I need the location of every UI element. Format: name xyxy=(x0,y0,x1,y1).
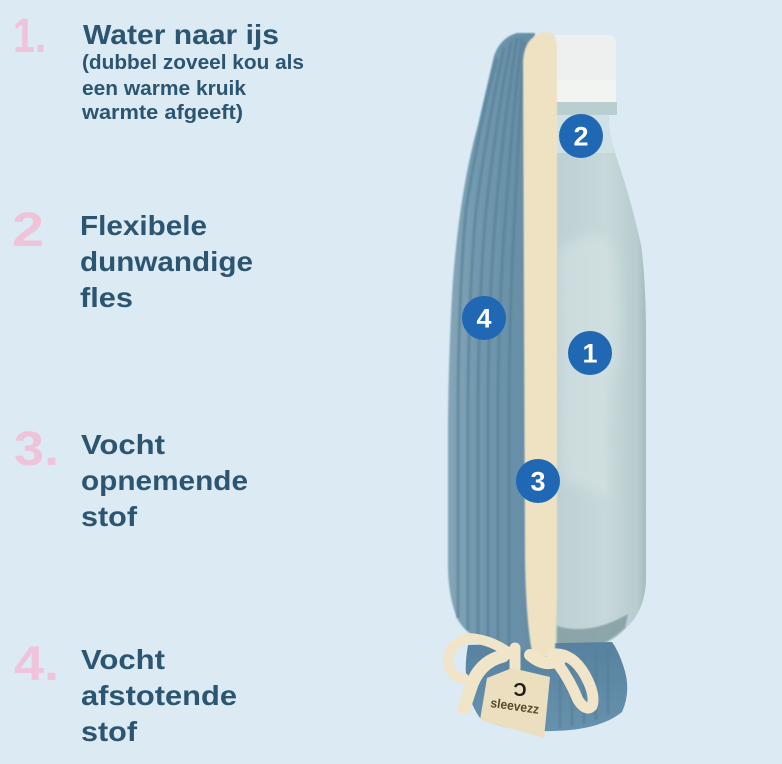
heading: vocht opnemende stof: Vocht xyxy=(81,429,165,460)
explanation text: een warme kruik xyxy=(82,78,247,100)
bottle cap xyxy=(555,35,616,102)
illustration: bottle with sleeve xyxy=(448,32,646,738)
heading: water naar ijs: Water naar ijs xyxy=(83,19,279,50)
heading: vocht afstotende stof: afstotende xyxy=(81,680,237,711)
sleeve ribs xyxy=(458,38,608,728)
heading: flexibele dunwandige fles xyxy=(80,210,253,313)
heading: flexibele dunwandige fles: dunwandige xyxy=(80,246,253,277)
number 2: 2 xyxy=(12,204,44,257)
heading: vocht afstotende stof: stof xyxy=(81,716,138,747)
cord with bow xyxy=(448,638,593,708)
explanation text: warmte afgeeft) xyxy=(81,102,243,124)
marker 3 xyxy=(516,459,560,503)
item 2: flexibele dunwandige fles xyxy=(12,204,253,313)
heading: vocht opnemende stof: stof xyxy=(81,501,138,532)
marker 2: 2 xyxy=(573,122,589,152)
marker 2 xyxy=(559,114,603,158)
heading: vocht afstotende stof xyxy=(81,644,237,747)
heading: flexibele dunwandige fles: fles xyxy=(80,282,133,313)
knit sleeve xyxy=(448,33,535,652)
marker 1: 1 xyxy=(582,338,598,368)
heading: flexibele dunwandige fles: Flexibele xyxy=(80,210,207,241)
bottle neck xyxy=(555,102,617,153)
glass bottle body xyxy=(555,153,646,647)
explanation text xyxy=(81,52,304,124)
number 4: 4. xyxy=(14,638,59,691)
number 3: 3. xyxy=(14,423,59,476)
hang tag: Ɔ xyxy=(514,680,526,700)
number 1: 1. xyxy=(13,10,46,63)
item 4: vocht afstotende stof xyxy=(14,638,237,747)
hang tag xyxy=(480,668,550,738)
explanation text: (dubbel zoveel kou als xyxy=(82,52,304,74)
item 3: vocht opnemende stof xyxy=(14,423,248,532)
knit sleeve foot xyxy=(466,642,627,731)
marker 4 xyxy=(462,296,506,340)
moisture absorbing cream strip xyxy=(523,32,557,658)
marker 3: 3 xyxy=(530,466,546,496)
heading: vocht afstotende stof: Vocht xyxy=(81,644,165,675)
item 1: water naar ijs xyxy=(13,10,304,124)
heading: vocht opnemende stof xyxy=(81,429,248,532)
glass highlights xyxy=(557,234,628,647)
hang tag: sleevezz xyxy=(490,695,541,717)
marker 4: 4 xyxy=(476,304,492,334)
marker 1 xyxy=(568,331,612,375)
heading: vocht opnemende stof: opnemende xyxy=(81,465,248,496)
